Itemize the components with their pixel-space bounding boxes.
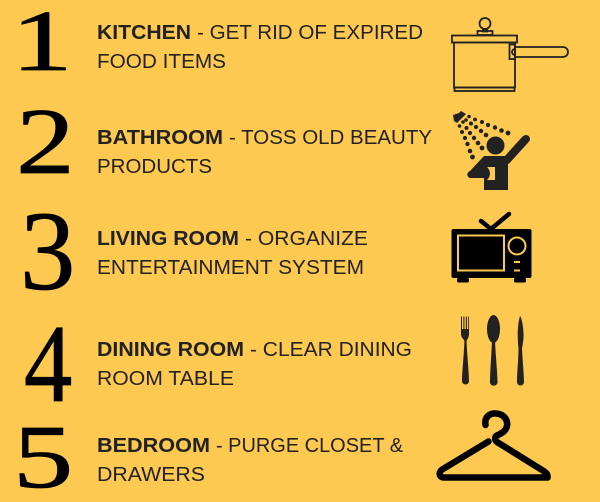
item 3 text: living room: ENTERTAINMENT SYSTEM (97, 257, 364, 279)
item 1 text: kitchen: FOOD ITEMS (97, 51, 226, 73)
item 5 text: bedroom: DRAWERS (97, 464, 205, 486)
item 2 text: bathroom: BATHROOM (97, 127, 223, 149)
icon: television (452, 214, 532, 282)
item 3 text: living room (97, 228, 368, 279)
item 3 text: living room: - ORGANIZE (245, 228, 368, 250)
item 5 text: bedroom: BEDROOM (97, 435, 210, 457)
item 3 text: living room: LIVING ROOM (97, 228, 239, 250)
numeral 2: 2 (16, 90, 75, 194)
item 5 text: bedroom: - PURGE CLOSET & (216, 435, 404, 457)
icon: fork, spoon and knife (461, 315, 524, 386)
item 1 text: kitchen (97, 22, 423, 73)
item 4 text: dining room: - CLEAR DINING (250, 339, 412, 361)
icon: cooking pot (452, 18, 568, 91)
numeral 4: 4 (24, 302, 72, 426)
item 1 text: kitchen: - GET RID OF EXPIRED (197, 22, 423, 44)
item 5 text: bedroom (97, 435, 404, 486)
item 2 text: bathroom: - TOSS OLD BEAUTY (229, 127, 432, 149)
spoon (487, 315, 500, 343)
icon: person in shower (453, 111, 529, 190)
item 1 text: kitchen: KITCHEN (97, 22, 191, 44)
item 4 text: dining room: ROOM TABLE (97, 368, 234, 390)
knife (517, 316, 524, 386)
fork (461, 316, 469, 384)
item 4 text: dining room: DINING ROOM (97, 339, 244, 361)
icon: coat hanger (440, 413, 548, 478)
numeral 3: 3 (20, 189, 75, 314)
item 2 text: bathroom: PRODUCTS (97, 156, 212, 178)
item 4 text: dining room (97, 339, 412, 390)
item 2 text: bathroom (97, 127, 432, 178)
